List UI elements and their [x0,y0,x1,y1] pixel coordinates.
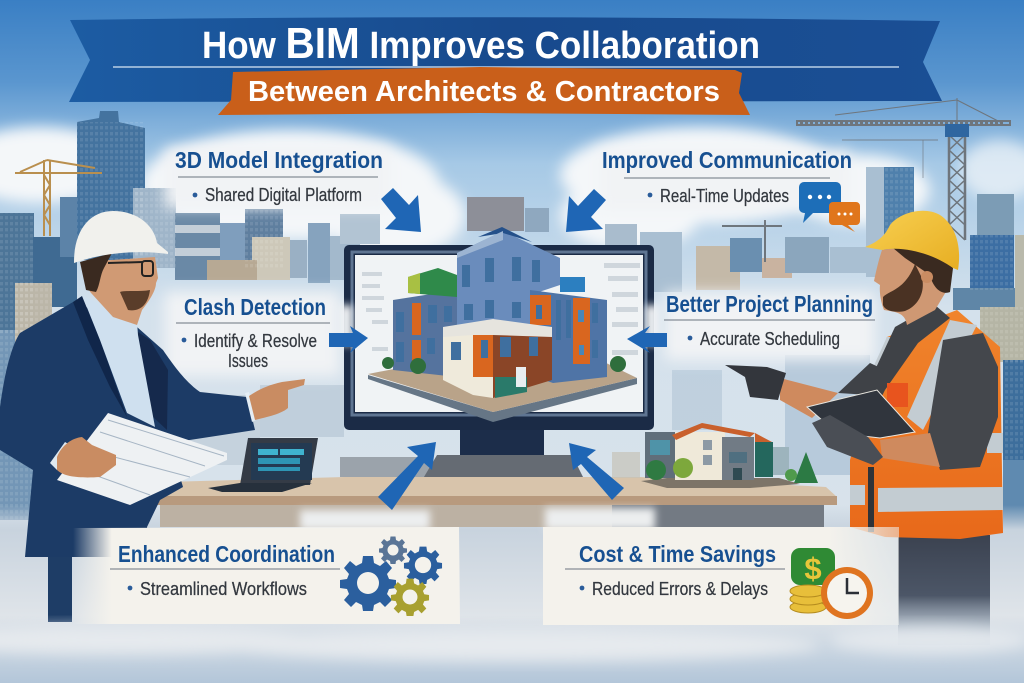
heading: Clash Detection: Issues [228,350,268,371]
monitor stand [418,428,588,487]
safety vest [850,310,1003,539]
blueprints [57,413,227,505]
arrow: bottom right [569,443,624,500]
desk [147,423,837,530]
contractor hard hat [865,211,959,270]
architect hand pointing [249,379,305,420]
right buildings [866,167,886,277]
tablet [807,390,915,438]
title banner [69,17,942,102]
monitor [339,227,659,487]
vest reflective strips [850,320,1003,512]
icon: money and clock [790,548,873,619]
left buildings [0,213,34,333]
heading: Improved Communication: Real-Time Updates [660,185,789,206]
architect neck and face [83,257,158,325]
title text: How BIM Improves Collaboration [202,19,760,68]
heading: Clash Detection [176,294,330,371]
contractor sleeve [928,333,998,470]
panel: Cost & Time Savings [543,527,899,625]
architect figure [0,211,305,622]
architect hair [80,253,112,292]
panel text: Reduced Errors & Delays [592,578,768,599]
panel heading: Enhanced Coordination [118,541,335,567]
background: cranes [15,160,102,236]
panel: soft haze behind labels [165,148,875,376]
subtitle ribbon [218,67,750,115]
icon: chat bubbles [799,182,860,232]
contractor pointing arm [780,378,838,418]
small house model [612,423,818,488]
arrow: bottom left [378,442,436,510]
heading: Clash Detection: Clash Detection [184,294,326,320]
heading: Improved Communication: Improved Communication [602,147,852,173]
contractor forearm [880,433,940,467]
heading: 3D Model Integration [175,147,383,205]
icon: money and clock: $ [804,551,822,586]
architect jacket [0,302,255,557]
fog at the bottom [0,626,1024,661]
architect hard hat [74,211,168,263]
contractor figure [725,211,1003,645]
architect glasses [108,261,153,276]
arrow: left [329,326,368,353]
building model [368,227,637,422]
heading: 3D Model Integration: Shared Digital Platform [205,184,362,205]
laptop [208,438,318,492]
far buildings [170,197,870,475]
architect beard [120,290,150,310]
centre haze band [340,457,430,477]
heading: Better Project Planning [664,291,875,349]
panel: Enhanced Coordination [73,527,460,624]
contractor shirt [868,305,950,400]
heading: Better Project Planning: Accurate Scheduling [700,328,840,349]
subtitle text: Between Architects & Contractors [248,76,720,108]
icon: gears [340,536,442,616]
contractor legs [898,535,990,645]
arrows [329,188,667,510]
heading: 3D Model Integration: 3D Model Integration [175,147,383,173]
arrow: top right [566,189,606,232]
heading: Improved Communication [602,147,852,206]
contractor head [874,248,953,325]
panel text: Streamlined Workflows [140,578,307,599]
arrow: top left [381,188,421,232]
contractor gloves [725,365,883,465]
window grid [0,122,1024,520]
heading: Better Project Planning: Better Project Planning [666,291,873,317]
architect hand on blueprints [57,437,116,477]
heading: Clash Detection: Identify & Resolve [194,330,317,351]
arrow: right [627,326,667,353]
architect legs [48,540,72,622]
architect shirt [82,295,155,427]
panel heading: Cost & Time Savings [579,541,776,567]
